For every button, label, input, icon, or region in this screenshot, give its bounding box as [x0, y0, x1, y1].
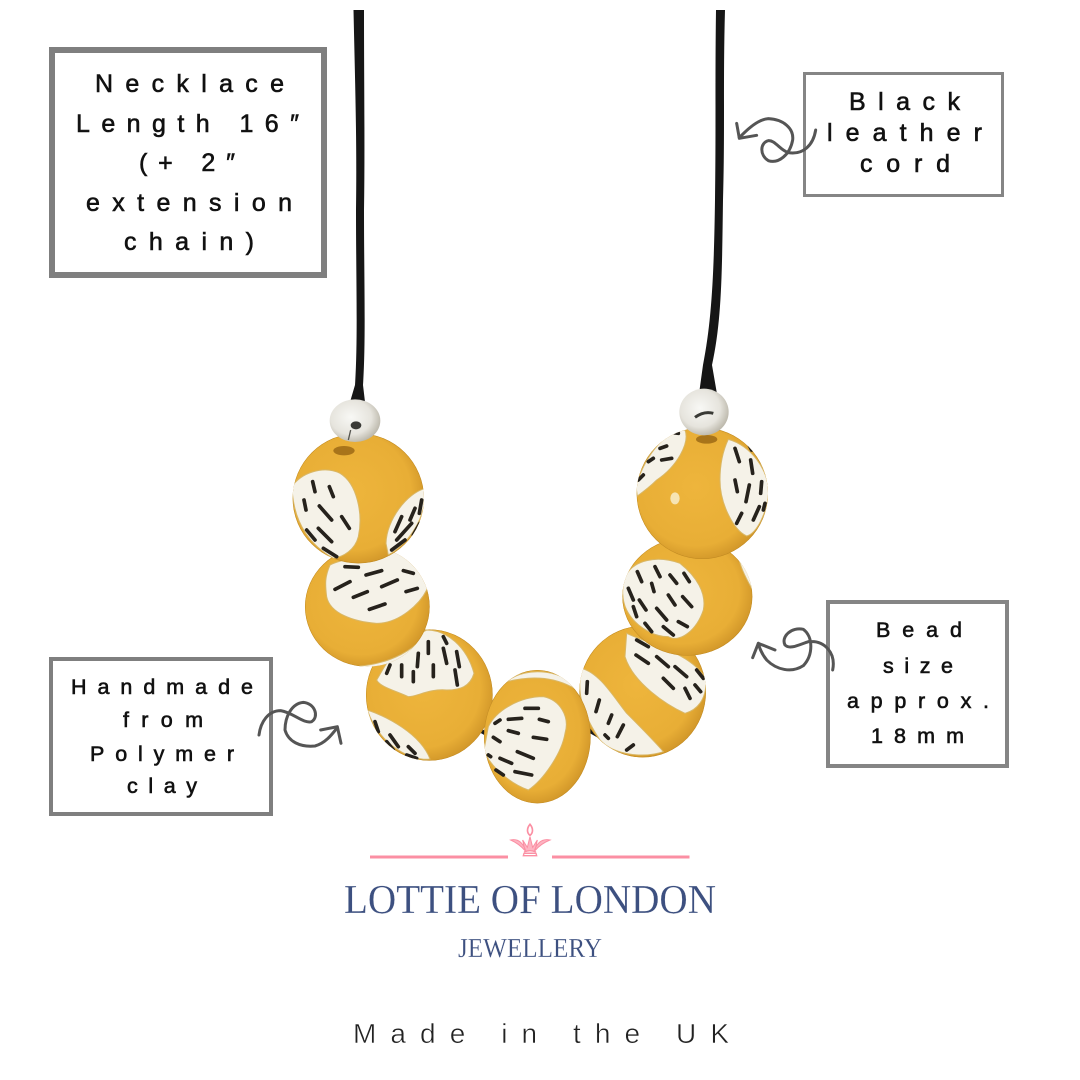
callout: necklace length: Length 16″ [76, 110, 299, 138]
arrow: to beads from handmade callout [259, 702, 341, 746]
necklace beads [292, 389, 769, 803]
footer: made in the UK: Made in the UK [353, 1018, 729, 1049]
callout: black leather cord [804, 74, 1002, 196]
callout: necklace length: chain) [124, 228, 254, 256]
cord between lower beads [477, 728, 600, 737]
callout: black leather cord: Black [849, 88, 960, 116]
callout: handmade from polymer clay: Polymer [90, 742, 234, 766]
callout: bead size: approx. [847, 689, 989, 713]
bead 7: top right [636, 428, 769, 559]
logo: crown divider [370, 824, 690, 858]
silver spacer bead: right [679, 389, 729, 435]
callout: necklace length: extension [86, 189, 292, 217]
logo: brand name: LOTTIE OF LONDON [344, 876, 716, 922]
silver spacer bead: left [330, 399, 380, 442]
bead 3: lower left [366, 629, 493, 761]
callout: black leather cord: cord [860, 150, 950, 178]
arrow: to beads from size callout [753, 629, 833, 670]
bead 1: top left [292, 433, 425, 563]
leather cord: right strand [699, 10, 725, 394]
logo: jewellery subtitle: JEWELLERY [458, 933, 602, 963]
arrow: to leather cord [737, 119, 816, 161]
callout: handmade from polymer clay: from [123, 708, 203, 732]
callout: bead size: size [883, 654, 953, 678]
callout: handmade from polymer clay: Handmade [71, 675, 253, 699]
bead 6: middle right [622, 538, 753, 656]
leather cord: left strand [350, 10, 365, 402]
bead 2: middle left [305, 547, 430, 670]
callout: necklace length [52, 50, 324, 275]
callout: handmade from polymer clay [51, 659, 271, 814]
callout: black leather cord: leather [827, 119, 982, 147]
callout: bead size: 18mm [871, 724, 964, 748]
callout: necklace length: (+ 2″ [139, 149, 235, 177]
callout: bead size [828, 602, 1007, 766]
bead 5: lower right [579, 626, 706, 757]
callout: necklace length: Necklace [95, 70, 284, 98]
callout: handmade from polymer clay: clay [127, 774, 197, 798]
bead 4: centre [484, 670, 591, 803]
callout: bead size: Bead [876, 618, 962, 642]
